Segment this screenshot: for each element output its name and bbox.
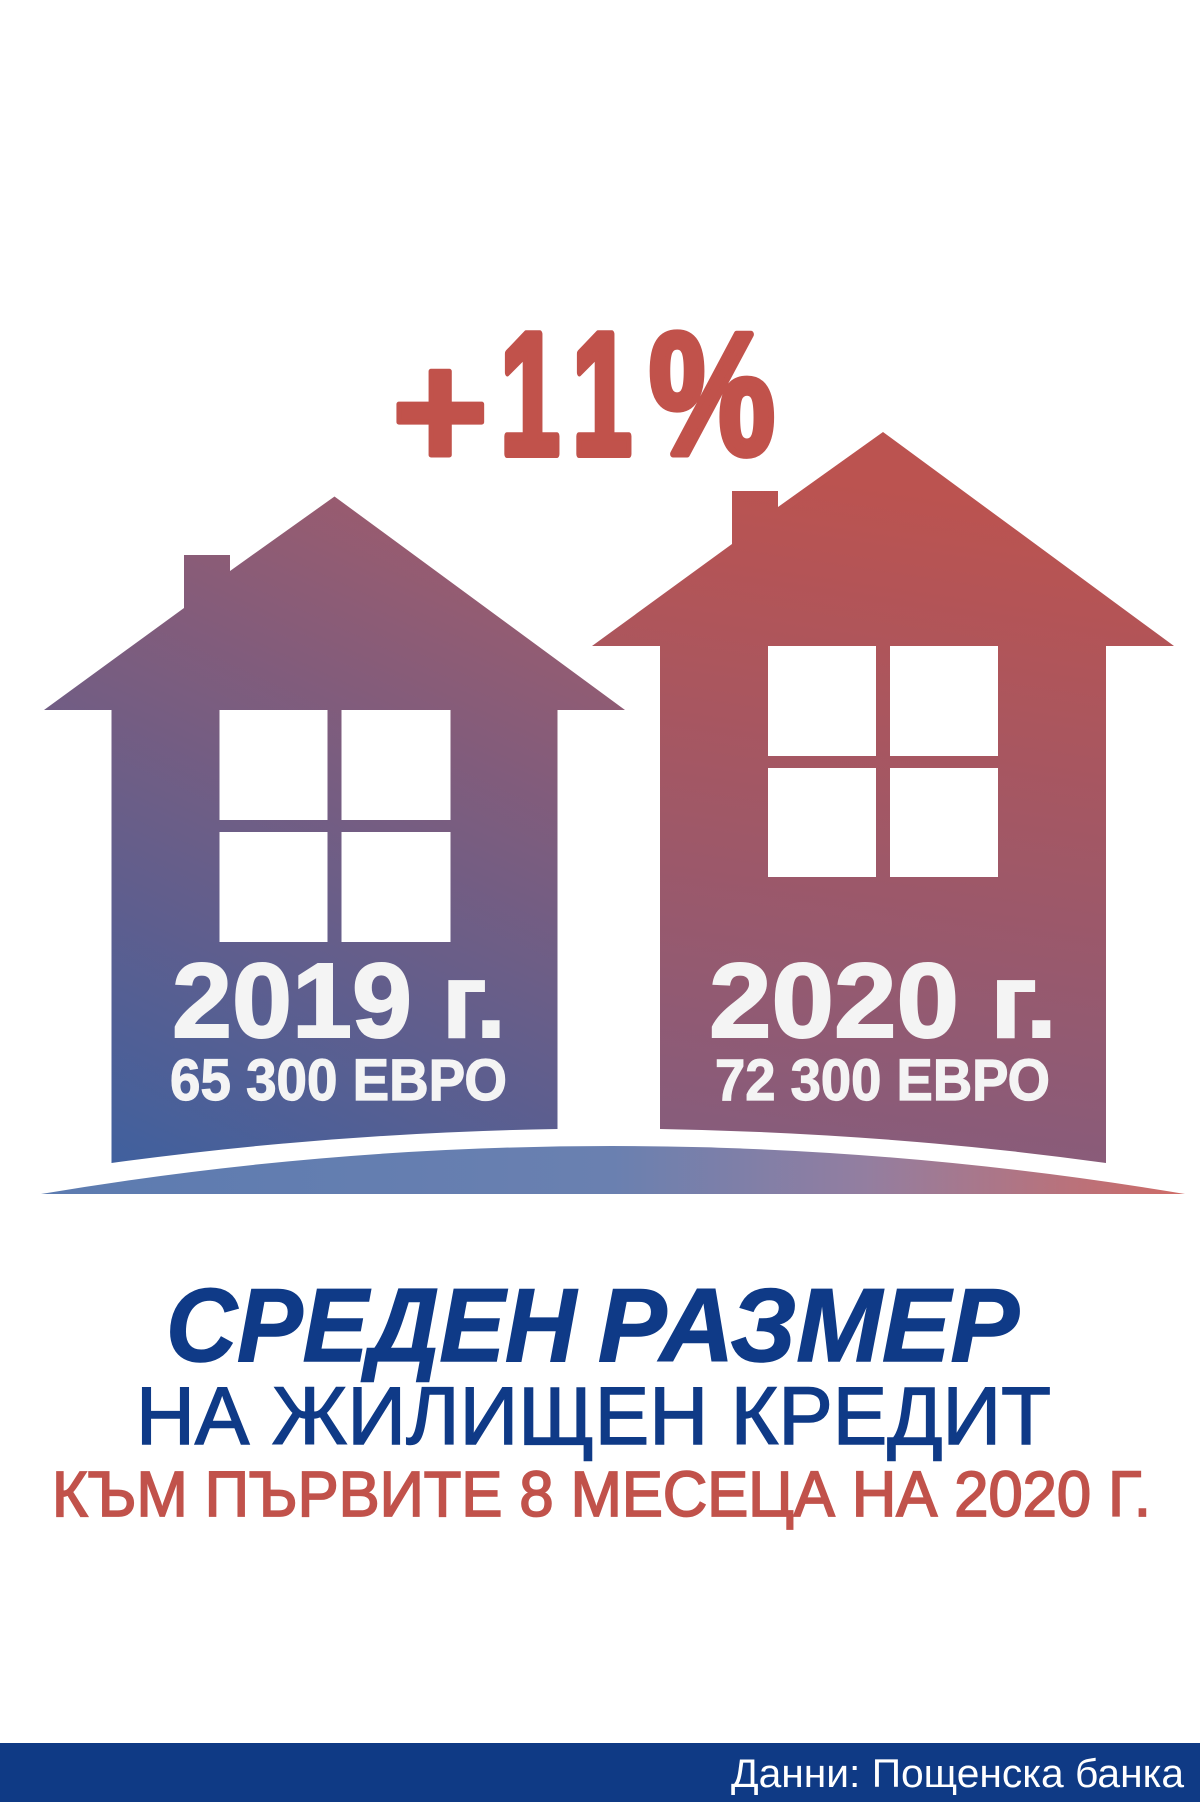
house 2020	[592, 432, 1174, 1163]
ground swoosh	[41, 1146, 1185, 1194]
period line: КЪМ ПЪРВИТЕ 8 МЕСЕЦА НА 2020 Г.	[52, 1458, 1151, 1530]
icon: house 2020 silhouette	[592, 432, 1174, 1163]
data source: Данни: Пощенска банка	[731, 1752, 1185, 1796]
title line: average size: СРЕДЕН	[166, 1268, 578, 1384]
house 2019	[44, 496, 625, 1163]
icon: house 2019 window	[220, 710, 450, 942]
percentage change heading: 1	[500, 296, 560, 491]
subtitle line: housing loan: НА ЖИЛИЩЕН КРЕДИТ	[136, 1371, 1051, 1462]
amount label 2020: 72 300 ЕВРО	[715, 1048, 1050, 1113]
year label 2019: 2019 г.	[172, 942, 506, 1060]
footer bar	[0, 1743, 1200, 1802]
percentage change heading: +	[392, 319, 488, 503]
title line: average size	[166, 1268, 1020, 1384]
icon: house 2019 silhouette	[44, 496, 625, 1163]
icon: house 2020 window	[768, 646, 998, 877]
title line: average size: РАЗМЕР	[598, 1268, 1020, 1384]
percentage change heading: 1	[572, 296, 632, 491]
year label 2020: 2020 г.	[709, 942, 1057, 1060]
title block	[52, 1268, 1151, 1530]
percentage change heading	[392, 296, 775, 503]
amount label 2019: 65 300 ЕВРО	[170, 1048, 507, 1113]
percentage change heading: %	[649, 296, 775, 491]
